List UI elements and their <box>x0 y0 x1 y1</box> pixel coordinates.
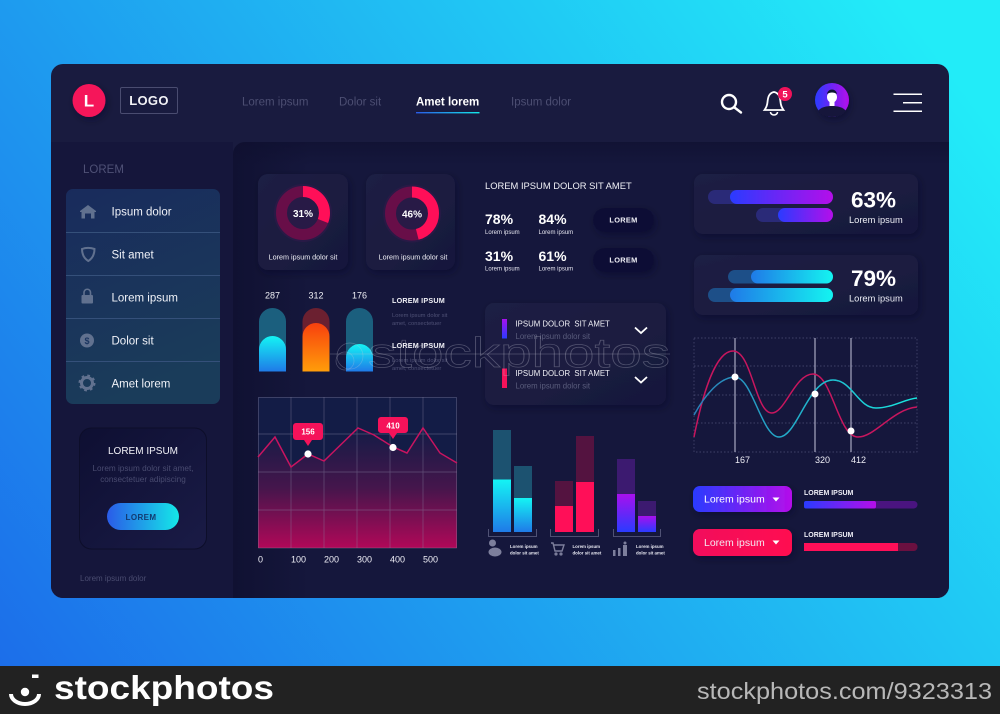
legend text: capsule chart: Lorem ipsum dolor sit <box>392 313 448 319</box>
chart axis labels <box>258 554 438 564</box>
menu item: lock <box>82 289 178 304</box>
icon: avatar <box>815 83 849 117</box>
area line chart <box>258 397 457 564</box>
stats block heading: LOREM IPSUM DOLOR SIT AMET <box>485 180 632 191</box>
panel: promo card: consectetuer adipiscing <box>100 475 186 484</box>
panel: dropdown list: IPSUM DOLOR SIT AMET <box>516 320 610 328</box>
chart axis labels: 500 <box>423 554 438 564</box>
icon: notification bell <box>764 87 792 115</box>
panel: 79% progress: Lorem ipsum <box>849 294 903 304</box>
navigation: Dolor sit <box>339 96 382 108</box>
stats grid: 78% <box>485 211 514 227</box>
sidebar heading: LOREM <box>83 164 124 176</box>
panel: donut 31%: Lorem ipsum dolor sit <box>269 252 337 262</box>
callout: 156 <box>293 423 323 458</box>
stats grid: Lorem ipsum <box>538 266 573 272</box>
grouped bar chart <box>488 430 665 556</box>
icon: stockphotos smile <box>9 674 41 706</box>
dropdown button: violet: Lorem ipsum <box>704 494 765 506</box>
progress: violet <box>804 490 918 508</box>
progress: red <box>804 532 918 551</box>
stats grid: 61% <box>538 248 567 264</box>
footer bar: stockphotos <box>54 669 274 706</box>
legend text: capsule chart: LOREM IPSUM <box>392 341 445 350</box>
chart axis labels: 100 <box>291 554 306 564</box>
capsule bar chart <box>259 290 373 372</box>
sidebar footer: Lorem ipsum dolor <box>80 574 147 583</box>
icon: shopping cart <box>551 543 564 555</box>
panel: donut 46% <box>366 174 455 270</box>
progress: violet: LOREM IPSUM <box>804 490 854 497</box>
stats grid: Lorem ipsum <box>538 230 573 236</box>
capsule bar chart: 287 <box>265 290 280 300</box>
menu item: shield: Sit amet <box>112 250 154 262</box>
icon: people <box>613 542 627 556</box>
panel: donut 46%: 46% <box>402 210 422 220</box>
menu item: gear: Amet lorem <box>112 378 170 390</box>
logo badge: L <box>84 92 94 110</box>
icon: hamburger menu <box>894 94 922 112</box>
menu item: gear <box>80 376 170 390</box>
footer bar: stockphotos.com/9323313 <box>697 678 992 704</box>
menu item: dollar: $ <box>84 336 90 346</box>
grouped bar chart: dolor sit amet <box>572 550 602 556</box>
navigation: Lorem ipsum <box>242 96 308 108</box>
callout: 156: 156 <box>301 428 315 436</box>
wave line chart: 412 <box>851 455 866 465</box>
menu item: home <box>80 205 172 218</box>
dropdown button: red: Lorem ipsum <box>704 537 765 549</box>
sidebar background <box>51 142 233 598</box>
menu item: shield <box>82 248 154 262</box>
legend text: capsule chart: amet, consectetuer <box>392 321 441 327</box>
stats grid: 31% <box>485 248 514 264</box>
panel: dropdown list <box>485 303 666 405</box>
navigation <box>242 96 571 113</box>
navigation: Ipsum dolor <box>511 96 571 108</box>
menu item: home: Ipsum dolor <box>112 206 172 218</box>
panel: dropdown list: Lorem ipsum dolor sit <box>516 382 591 390</box>
panel: donut 31%: 31% <box>293 209 313 220</box>
panel: 63% progress: 63% <box>851 188 896 212</box>
wave line chart <box>694 338 917 465</box>
panel: promo card <box>80 428 206 549</box>
grouped bar chart: dolor sit amet <box>510 550 539 556</box>
chart axis labels: 0 <box>258 554 263 564</box>
wave line chart: 167 <box>735 455 750 465</box>
legend text: capsule chart: LOREM IPSUM <box>392 296 445 305</box>
callout: 410 <box>378 417 408 451</box>
dropdown button: violet <box>693 486 792 512</box>
dashboard panel <box>51 64 949 598</box>
main content area <box>233 142 949 598</box>
panel: sidebar menu <box>66 189 220 404</box>
pill button 2 <box>593 248 654 272</box>
stats grid: Lorem ipsum <box>485 266 520 272</box>
logo badge <box>72 84 106 117</box>
legend text: capsule chart: Lorem ipsum dolor sit <box>392 358 448 364</box>
chart axis labels: 200 <box>324 554 339 564</box>
button: LOREM <box>126 513 156 522</box>
panel: 63% progress: Lorem ipsum <box>849 215 903 225</box>
stats grid: Lorem ipsum <box>485 230 520 236</box>
callout: 410: 410 <box>386 422 400 430</box>
legend text: capsule chart: amet, consectetuer <box>392 366 441 372</box>
chart axis labels: 300 <box>357 554 372 564</box>
pill button 2: LOREM <box>609 256 638 265</box>
capsule bar chart: 312 <box>308 290 324 300</box>
icon: piggy bank <box>488 540 502 556</box>
panel: promo card: Lorem ipsum dolor sit amet, <box>92 464 194 473</box>
menu item: dollar: Dolor sit <box>112 336 154 348</box>
legend text: capsule chart <box>392 296 448 372</box>
panel: donut 31% <box>258 174 348 270</box>
grouped bar chart: Lorem ipsum <box>636 544 664 549</box>
logo box <box>120 88 178 114</box>
watermark <box>330 329 670 376</box>
panel: 79% progress: 79% <box>851 266 896 291</box>
logo box: LOGO <box>129 93 169 108</box>
menu item: dollar <box>80 334 154 348</box>
pill button 1: LOREM <box>609 216 638 225</box>
progress: red: LOREM IPSUM <box>804 532 854 539</box>
dropdown button: red <box>693 529 792 556</box>
stats grid <box>485 211 573 272</box>
pill button 1 <box>593 208 654 232</box>
icon: search <box>722 95 741 112</box>
grouped bar chart: Lorem ipsum <box>572 544 600 549</box>
wave line chart: 320 <box>815 455 830 465</box>
panel: dropdown list: Lorem ipsum dolor sit <box>516 332 591 341</box>
capsule bar chart: 176 <box>352 290 367 300</box>
grouped bar chart: Lorem ipsum <box>510 544 538 549</box>
chart axis labels: 400 <box>390 554 405 564</box>
panel: dropdown list: IPSUM DOLOR SIT AMET <box>516 369 610 378</box>
grouped bar chart: dolor sit amet <box>636 550 665 556</box>
icon: notification bell: 5 <box>782 90 788 100</box>
footer bar <box>0 666 1000 714</box>
panel: 79% progress <box>694 255 918 315</box>
panel: donut 46%: Lorem ipsum dolor sit <box>379 252 447 262</box>
watermark: stockphotos <box>368 329 670 376</box>
panel: 63% progress <box>694 174 918 234</box>
stats grid: 84% <box>538 211 567 227</box>
navigation: Amet lorem <box>416 96 479 108</box>
menu item: lock: Lorem ipsum <box>112 292 178 304</box>
panel: promo card: LOREM IPSUM <box>108 446 178 457</box>
